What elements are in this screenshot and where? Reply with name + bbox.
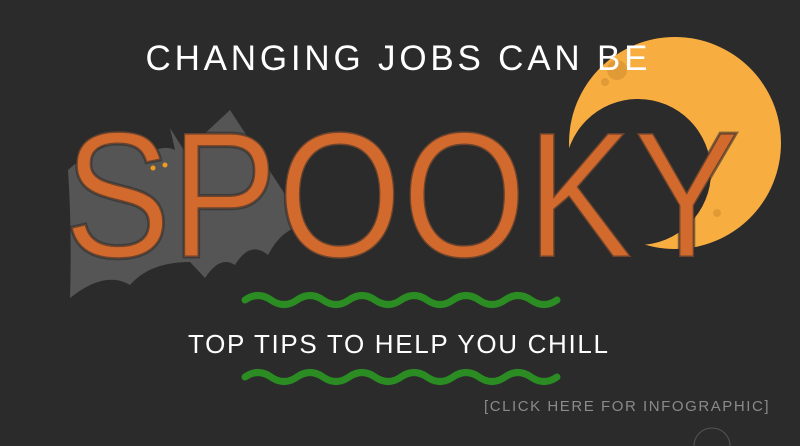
link text: [CLICK HERE FOR INFOGRAPHIC] bbox=[484, 398, 770, 415]
icon: moon bbox=[565, 37, 781, 249]
icon: bat bbox=[68, 110, 305, 298]
wave bottom bbox=[245, 372, 557, 382]
title: CHANGING JOBS CAN BE bbox=[146, 39, 650, 78]
decorative circle bbox=[694, 428, 730, 446]
subtitle: TOP TIPS TO HELP YOU CHILL bbox=[188, 329, 610, 359]
wave top bbox=[245, 296, 557, 304]
